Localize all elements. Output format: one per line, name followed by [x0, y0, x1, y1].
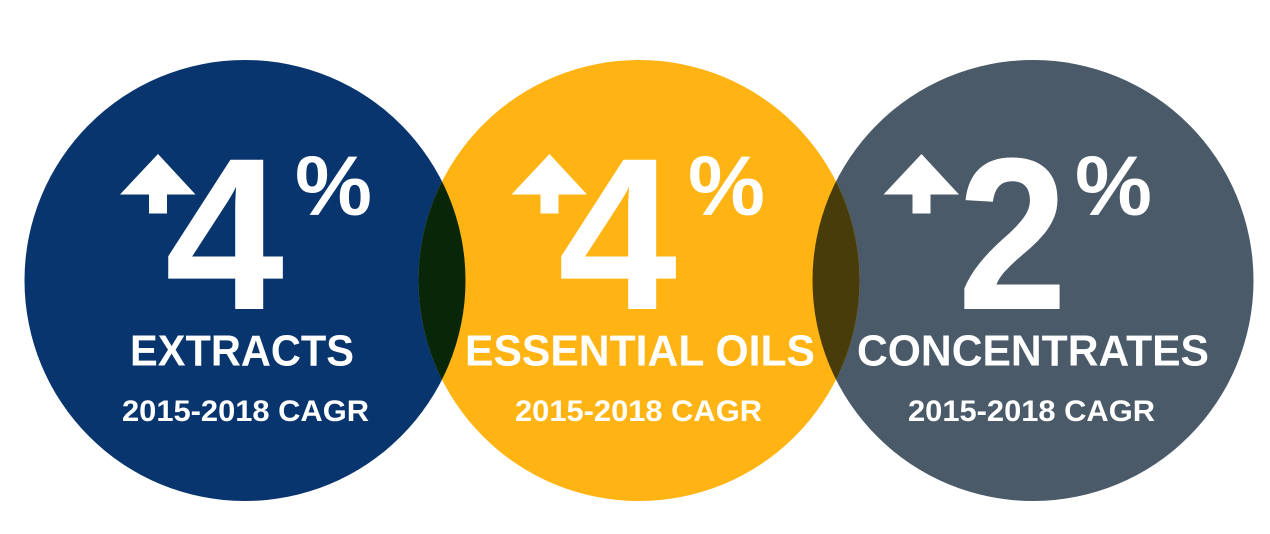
- icon: up arrow: [512, 154, 587, 214]
- percent sign: %: [688, 139, 765, 233]
- label: period: 2015-2018 CAGR: [515, 395, 762, 428]
- circle: essential oils: [418, 60, 860, 501]
- icon: up arrow: [120, 154, 196, 214]
- label: period: 2015-2018 CAGR: [908, 395, 1155, 428]
- panel: concentrates: [857, 113, 1209, 428]
- value: 4: 4: [165, 113, 284, 355]
- label: period: 2015-2018 CAGR: [122, 395, 369, 428]
- value: 2: 2: [958, 113, 1068, 355]
- percent sign: %: [1075, 139, 1152, 233]
- panel: extracts: [120, 113, 372, 428]
- label: essential oils: ESSENTIAL OILS: [465, 326, 815, 376]
- percent sign: %: [295, 139, 372, 233]
- value: 4: 4: [558, 113, 677, 355]
- circle: extracts: [24, 60, 466, 501]
- icon: up arrow: [884, 154, 959, 214]
- label: extracts: EXTRACTS: [130, 326, 354, 376]
- panel: essential oils: [465, 113, 815, 428]
- circle: concentrates: [812, 60, 1254, 501]
- label: concentrates: CONCENTRATES: [857, 326, 1209, 376]
- overlap: essential oils and concentrates: [812, 182, 860, 380]
- overlap: extracts and essential oils: [418, 182, 466, 380]
